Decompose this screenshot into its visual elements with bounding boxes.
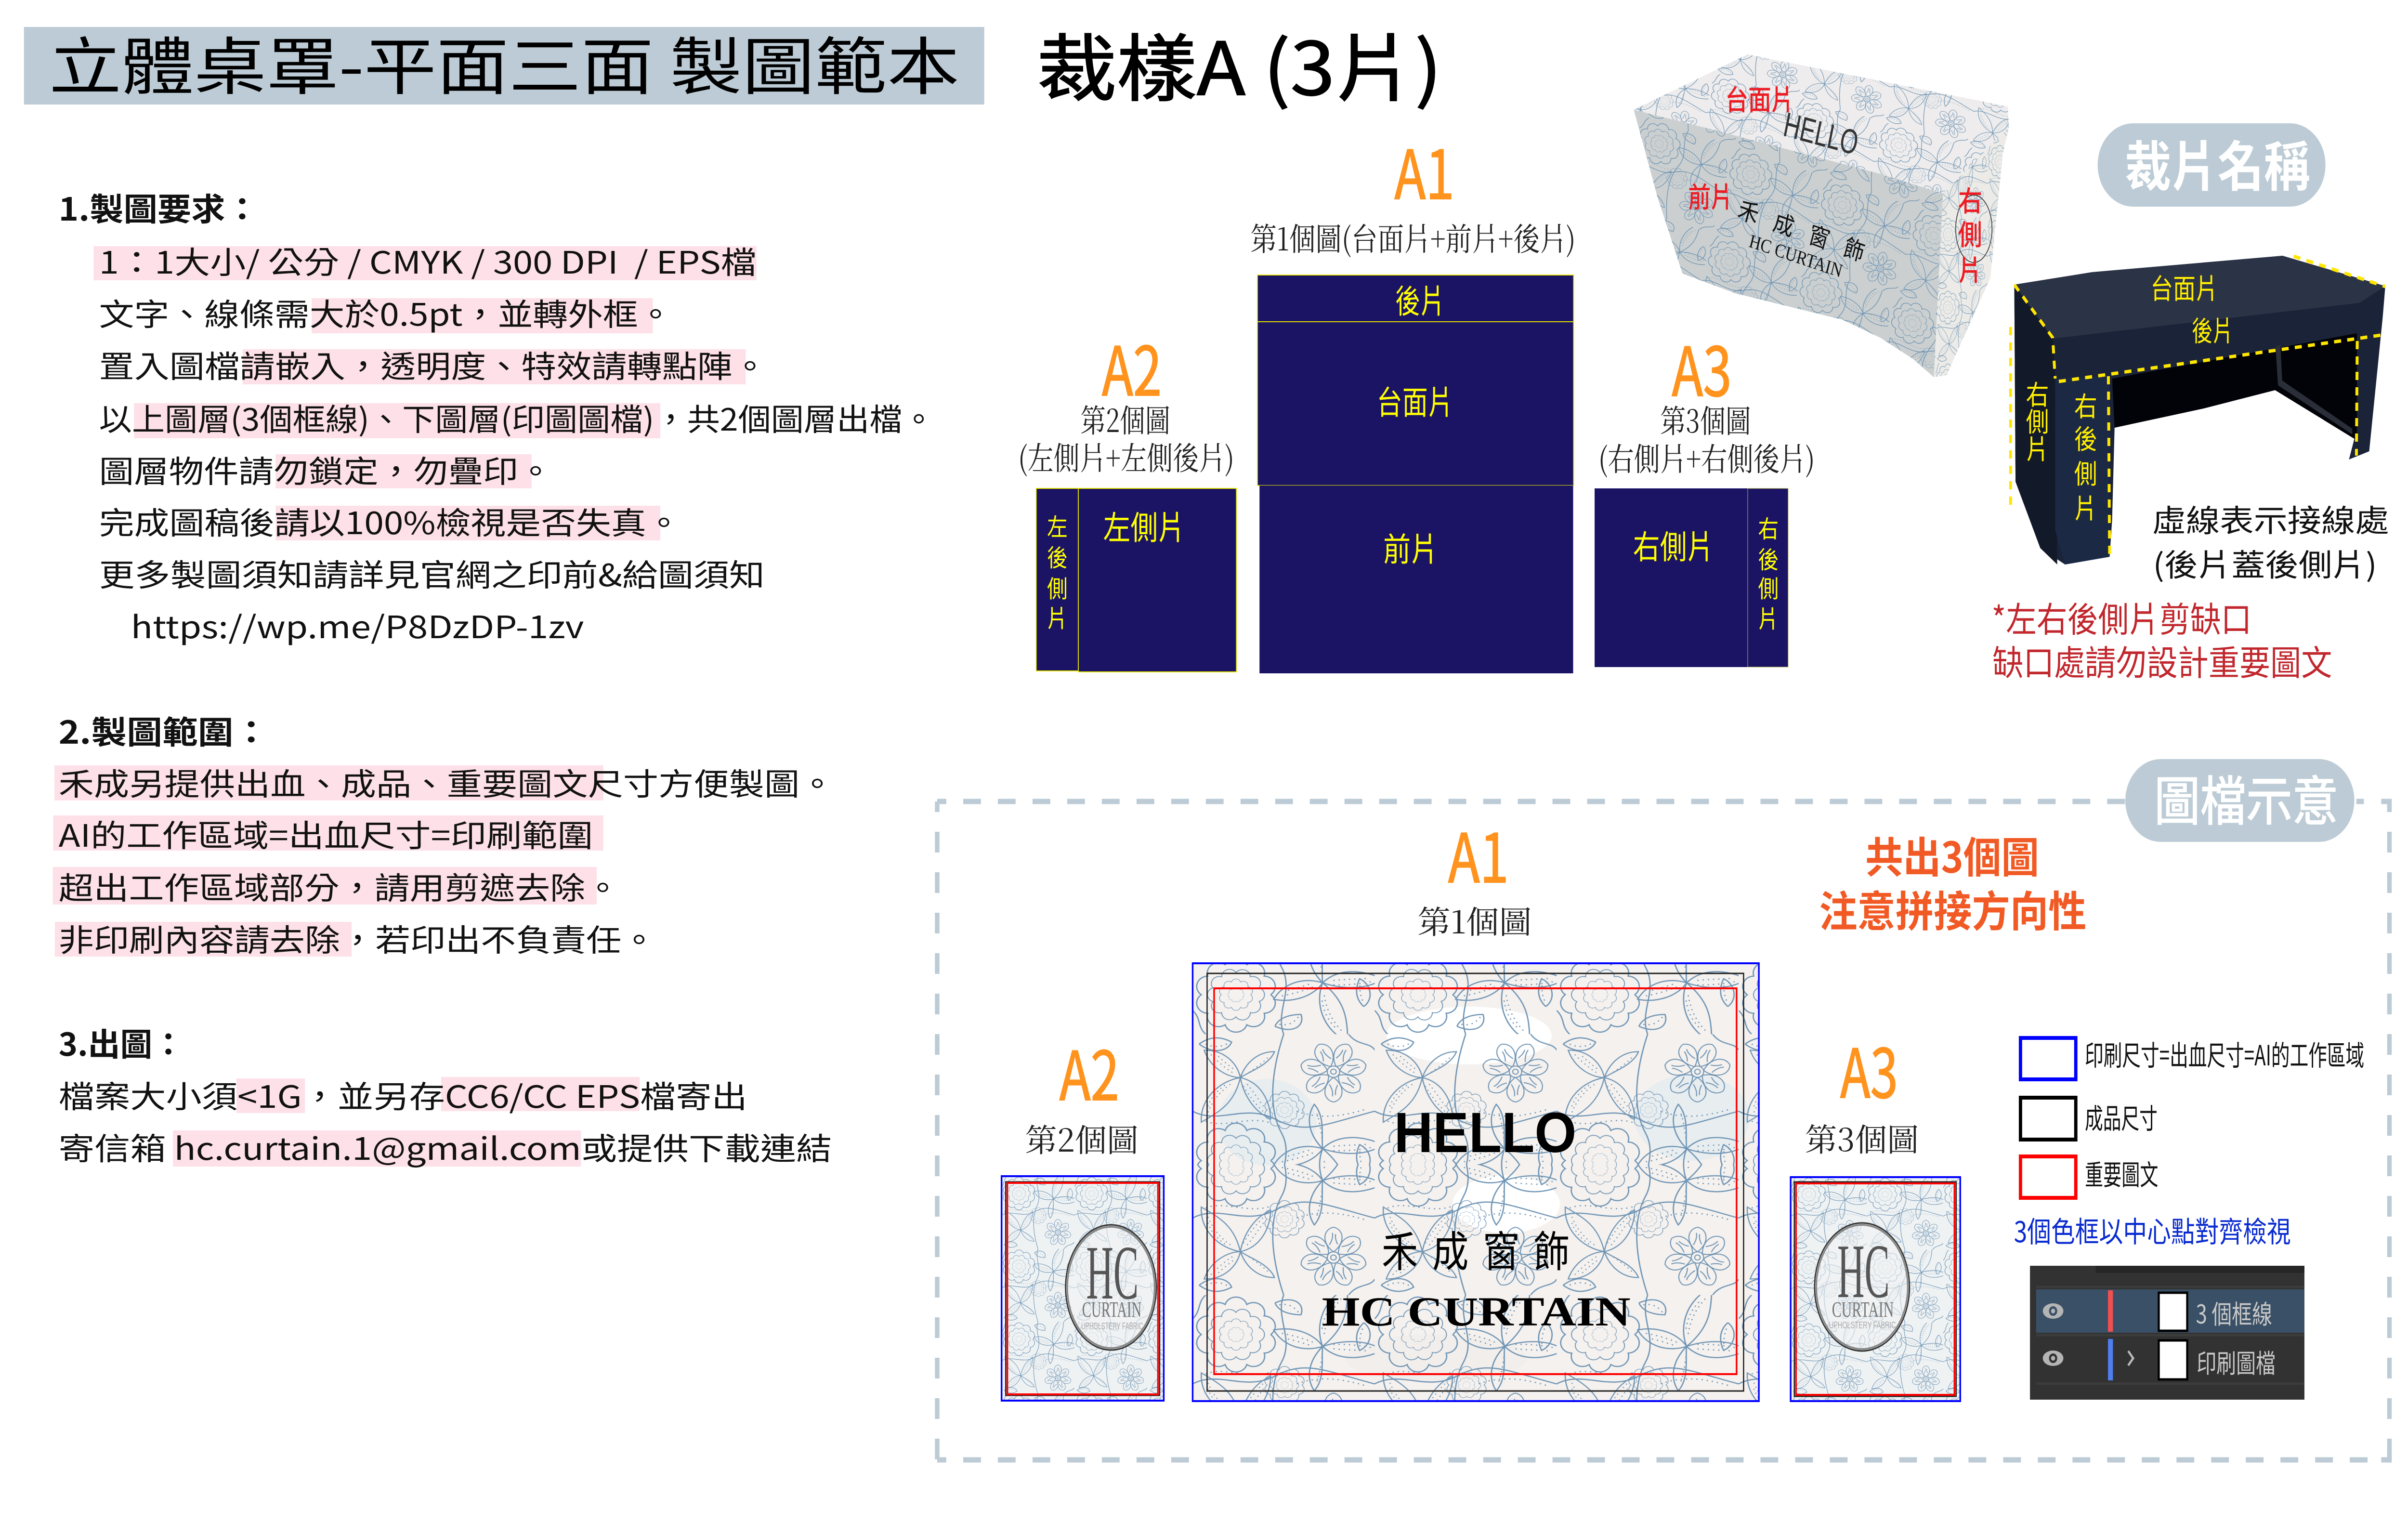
A1 floral lower half (1192, 1165, 1759, 1401)
dark cover label right rear side: 側 (2074, 453, 2097, 492)
rear side drape (2055, 376, 2109, 564)
label left rear side: 側 (1047, 570, 1068, 604)
cover front face (1634, 110, 1943, 377)
piece: front (1259, 485, 1573, 673)
A2 logo: CURTAIN (1082, 1298, 1141, 1322)
dark cover label right rear side: 後 (2074, 419, 2097, 457)
pill: file example: 圖檔示意 (2154, 759, 2338, 836)
layers panel screenshot (2030, 1266, 2304, 1400)
heading: example A3 (1805, 1020, 1919, 1160)
piece: left rear side (1036, 488, 1078, 671)
A1 background (1192, 963, 1759, 1401)
style title: 裁樣A (3片) (1037, 10, 1442, 116)
label A2: A2 (1102, 317, 1162, 415)
requirement line 1: 1：1大小/ 公分 / CMYK / 300 DPI / EPS檔 (99, 238, 757, 283)
heading: output: 3.出圖： (59, 1019, 184, 1065)
output line 1: 檔案大小須<1G，並另存CC6/CC EPS檔寄出 (59, 1073, 747, 1117)
A2 floral (1002, 1176, 1164, 1401)
cover right face (1934, 127, 2009, 377)
cover top face (1634, 54, 2009, 194)
highlight: range line 1 (54, 765, 603, 800)
A2 finished frame (1006, 1182, 1160, 1395)
highlight: range line 4 (55, 922, 352, 957)
label right side: 右側片 (1633, 522, 1714, 568)
dark cover label right side: 片 (2026, 429, 2049, 467)
A3 finished frame (1794, 1182, 1956, 1396)
A3 safe frame (1796, 1183, 1954, 1395)
dark cover label right side: 側 (2026, 401, 2049, 440)
A3 logo (1815, 1223, 1910, 1351)
panel: cut diagram A3 (1595, 318, 1815, 667)
layer name row 1: 3 個框線 (2196, 1294, 2272, 1331)
heading: example A3: A3 (1840, 1020, 1898, 1117)
output line 2: 寄信箱 hc.curtain.1@gmail.com或提供下載連結 (59, 1125, 832, 1169)
requirement line 7: 更多製圖須知請詳見官網之印前&給圖須知 (99, 551, 765, 595)
callout: three files note: 注意拼接方向性 (1819, 878, 2086, 939)
layer row dividers (2036, 1287, 2304, 1384)
note: seam explanation (2152, 497, 2389, 585)
highlight: requirement line 3 (243, 349, 746, 384)
caption A1: 第1個圖(台面片+前片+後片) (1250, 214, 1576, 260)
text block: output (59, 1019, 832, 1169)
dark cover label right side: 右 (2026, 374, 2049, 413)
highlight: range line 2 (53, 815, 603, 851)
A1 colour blotches (1217, 1007, 1750, 1382)
label left rear side: 片 (1047, 600, 1068, 634)
colour bar red (2108, 1290, 2113, 1332)
caption A3 line 2: (右側片+右側後片) (1598, 434, 1815, 480)
cover label right: 右 (1958, 178, 1982, 219)
photo: dark table cover (2011, 256, 2385, 564)
thumbnail row 1 (2159, 1293, 2187, 1331)
panel: cut diagram A1 (1250, 121, 1576, 673)
legend swatch black (2020, 1098, 2076, 1140)
label left rear side: 左 (1047, 508, 1068, 543)
label left rear side: 後 (1047, 539, 1068, 574)
note: center alignment: 3個色框以中心點對齊檢視 (2014, 1209, 2291, 1251)
note: red warning: 缺口處請勿設計重要圖文 (1992, 635, 2332, 685)
legend: frame colours (2020, 1033, 2364, 1198)
left side drape (2015, 285, 2057, 564)
legend text black: 成品尺寸 (2085, 1096, 2158, 1137)
table top surface (2015, 256, 2385, 339)
A1 floral upper half (1192, 963, 1759, 1165)
highlight: email (173, 1130, 581, 1167)
label left side: 左側片 (1103, 502, 1185, 549)
cloth silhouette (2015, 256, 2385, 564)
A2 logo (1066, 1225, 1156, 1350)
A2 logo: HC (1086, 1230, 1139, 1315)
text block: production range (53, 707, 835, 960)
label right rear side: 片 (1758, 600, 1779, 635)
label A1: A1 (1394, 121, 1454, 219)
note: seam explanation: 虛線表示接線處 (2152, 497, 2389, 541)
caption A3 line 1: 第3個圖 (1660, 396, 1751, 442)
cover label right: 片 (1958, 248, 1982, 289)
A3 background (1791, 1177, 1960, 1401)
text brand: 禾成窗飾 (1382, 1218, 1570, 1279)
heading: example A2: 第2個圖 (1025, 1115, 1139, 1161)
heading: example A1: 第1個圖 (1417, 897, 1532, 943)
text block: production requirements (59, 184, 935, 647)
legend text red: 重要圖文 (2085, 1152, 2159, 1193)
legend swatch red (2020, 1156, 2076, 1198)
cover text brand: 禾成窗飾 (1735, 191, 1869, 268)
highlight: file format (441, 1077, 640, 1111)
panel: cut diagram A2 (1018, 317, 1236, 672)
heading: example A2 (1025, 1022, 1139, 1161)
cover label front: 前片 (1688, 174, 1733, 215)
label right rear side: 側 (1758, 570, 1779, 604)
A2 safe frame (1008, 1183, 1158, 1394)
artwork: A2 (1002, 1176, 1164, 1401)
cover logo (1956, 195, 1992, 262)
cover label top: 台面片 (1726, 77, 1794, 118)
requirement line 3: 置入圖檔請嵌入，透明度、特效請轉點陣。 (99, 342, 768, 387)
photo: printed table cover (1634, 54, 2009, 377)
A2 background (1002, 1176, 1164, 1401)
A3 logo: HC (1837, 1229, 1890, 1314)
note: seam explanation: (後片蓋後側片) (2153, 541, 2377, 585)
A3 floral (1791, 1177, 1960, 1401)
seam dashes (2015, 285, 2055, 379)
A3 logo: UPHOLSTERY FABRIC (1829, 1320, 1896, 1330)
inner leg (2276, 345, 2352, 434)
chevron (2128, 1351, 2133, 1365)
artwork: A1 (1192, 963, 1759, 1401)
eye icon row 2 (2043, 1351, 2063, 1366)
label right rear side: 後 (1758, 541, 1779, 576)
piece: left side (1078, 488, 1236, 672)
colour bar blue (2108, 1339, 2113, 1380)
artwork: A3 (1791, 1177, 1960, 1401)
requirement line 2: 文字、線條需大於0.5pt，並轉外框。 (99, 290, 673, 335)
heading: example A1 (1417, 804, 1532, 943)
legend swatch blue (2020, 1038, 2076, 1079)
requirement line 5: 圖層物件請勿鎖定，勿疊印。 (99, 447, 553, 492)
title banner: 立體桌罩-平面三面 製圖範本 (49, 17, 959, 107)
range line 2: AI的工作區域=出血尺寸=印刷範圍 (59, 812, 593, 856)
safe area frame (1214, 988, 1737, 1374)
caption A2 line 2: (左側片+左側後片) (1018, 433, 1234, 479)
thumbnail row 2 (2159, 1340, 2187, 1379)
heading: example A1: A1 (1448, 804, 1509, 902)
label right rear side: 右 (1758, 510, 1779, 545)
heading: example A3: 第3個圖 (1805, 1115, 1919, 1160)
caption A2 line 1: 第2個圖 (1080, 395, 1170, 441)
pill: cut piece names: 裁片名稱 (2125, 124, 2310, 202)
dark cover label top: 台面片 (2150, 266, 2218, 307)
text HC CURTAIN: HC CURTAIN (1322, 1289, 1631, 1335)
cover text HC CURTAIN: HC CURTAIN (1747, 231, 1845, 282)
A2 logo: UPHOLSTERY FABRIC (1081, 1321, 1143, 1331)
highlight: requirement line 6 (275, 506, 660, 540)
requirement line 6: 完成圖稿後請以100%檢視是否失真。 (99, 499, 681, 543)
opening under table (2112, 333, 2357, 439)
range line 1: 禾成另提供出血、成品、重要圖文尺寸方便製圖。 (59, 760, 835, 804)
heading: requirements: 1.製圖要求： (59, 184, 259, 230)
requirement line 4: 以上圖層(3個框線)、下圖層(印圖圖檔)，共2個圖層出檔。 (99, 395, 935, 440)
highlight: requirement line 4 (134, 403, 660, 438)
eye icon row 1 (2043, 1303, 2063, 1319)
heading: range: 2.製圖範圍： (59, 707, 269, 753)
piece: right rear side (1748, 488, 1788, 667)
highlight: range line 3 (53, 867, 597, 905)
piece: right side (1595, 488, 1748, 667)
panel: file example dashed frame (937, 801, 2389, 1460)
text HELLO: HELLO (1394, 1102, 1576, 1165)
panel top bar (2095, 1266, 2304, 1273)
highlight: requirement line 2 (312, 298, 653, 333)
cover label right: 側 (1958, 212, 1982, 253)
panel background (2030, 1266, 2304, 1400)
A3 logo: CURTAIN (1832, 1298, 1894, 1322)
label front: 前片 (1383, 524, 1438, 571)
bleed frame (1192, 963, 1759, 1401)
A2 bleed frame (1002, 1176, 1164, 1401)
range line 3: 超出工作區域部分，請用剪遮去除。 (59, 864, 620, 908)
label back: 後片 (1395, 276, 1445, 323)
callout: three files note: 共出3個圖 (1865, 824, 2039, 885)
highlight: requirement line 1 (94, 246, 757, 280)
requirement link: https://wp.me/P8DzDP-1zv (131, 603, 584, 647)
piece: back (1257, 275, 1573, 322)
dark cover label right rear side: 片 (2074, 488, 2097, 526)
A3 bleed frame (1791, 1177, 1960, 1401)
note: red warning: *左右後側片剪缺口 (1991, 592, 2251, 642)
highlight: requirement line 5 (275, 454, 532, 488)
dark cover label right rear side: 右 (2074, 386, 2097, 424)
callout: three files note (1819, 824, 2086, 939)
layer row highlighted (2036, 1289, 2304, 1333)
dark cover label back: 後片 (2192, 308, 2234, 349)
cover text HELLO: HELLO (1780, 105, 1861, 163)
label table top: 台面片 (1377, 377, 1453, 424)
finished size frame (1207, 973, 1743, 1391)
label A3: A3 (1672, 318, 1732, 416)
layer name row 2: 印刷圖檔 (2197, 1343, 2276, 1380)
highlight: file size (236, 1078, 305, 1113)
note: red warning (1991, 592, 2332, 685)
range line 4: 非印刷內容請去除，若印出不負責任。 (59, 916, 656, 960)
heading: example A2: A2 (1060, 1022, 1119, 1120)
piece: table top (1257, 322, 1573, 485)
